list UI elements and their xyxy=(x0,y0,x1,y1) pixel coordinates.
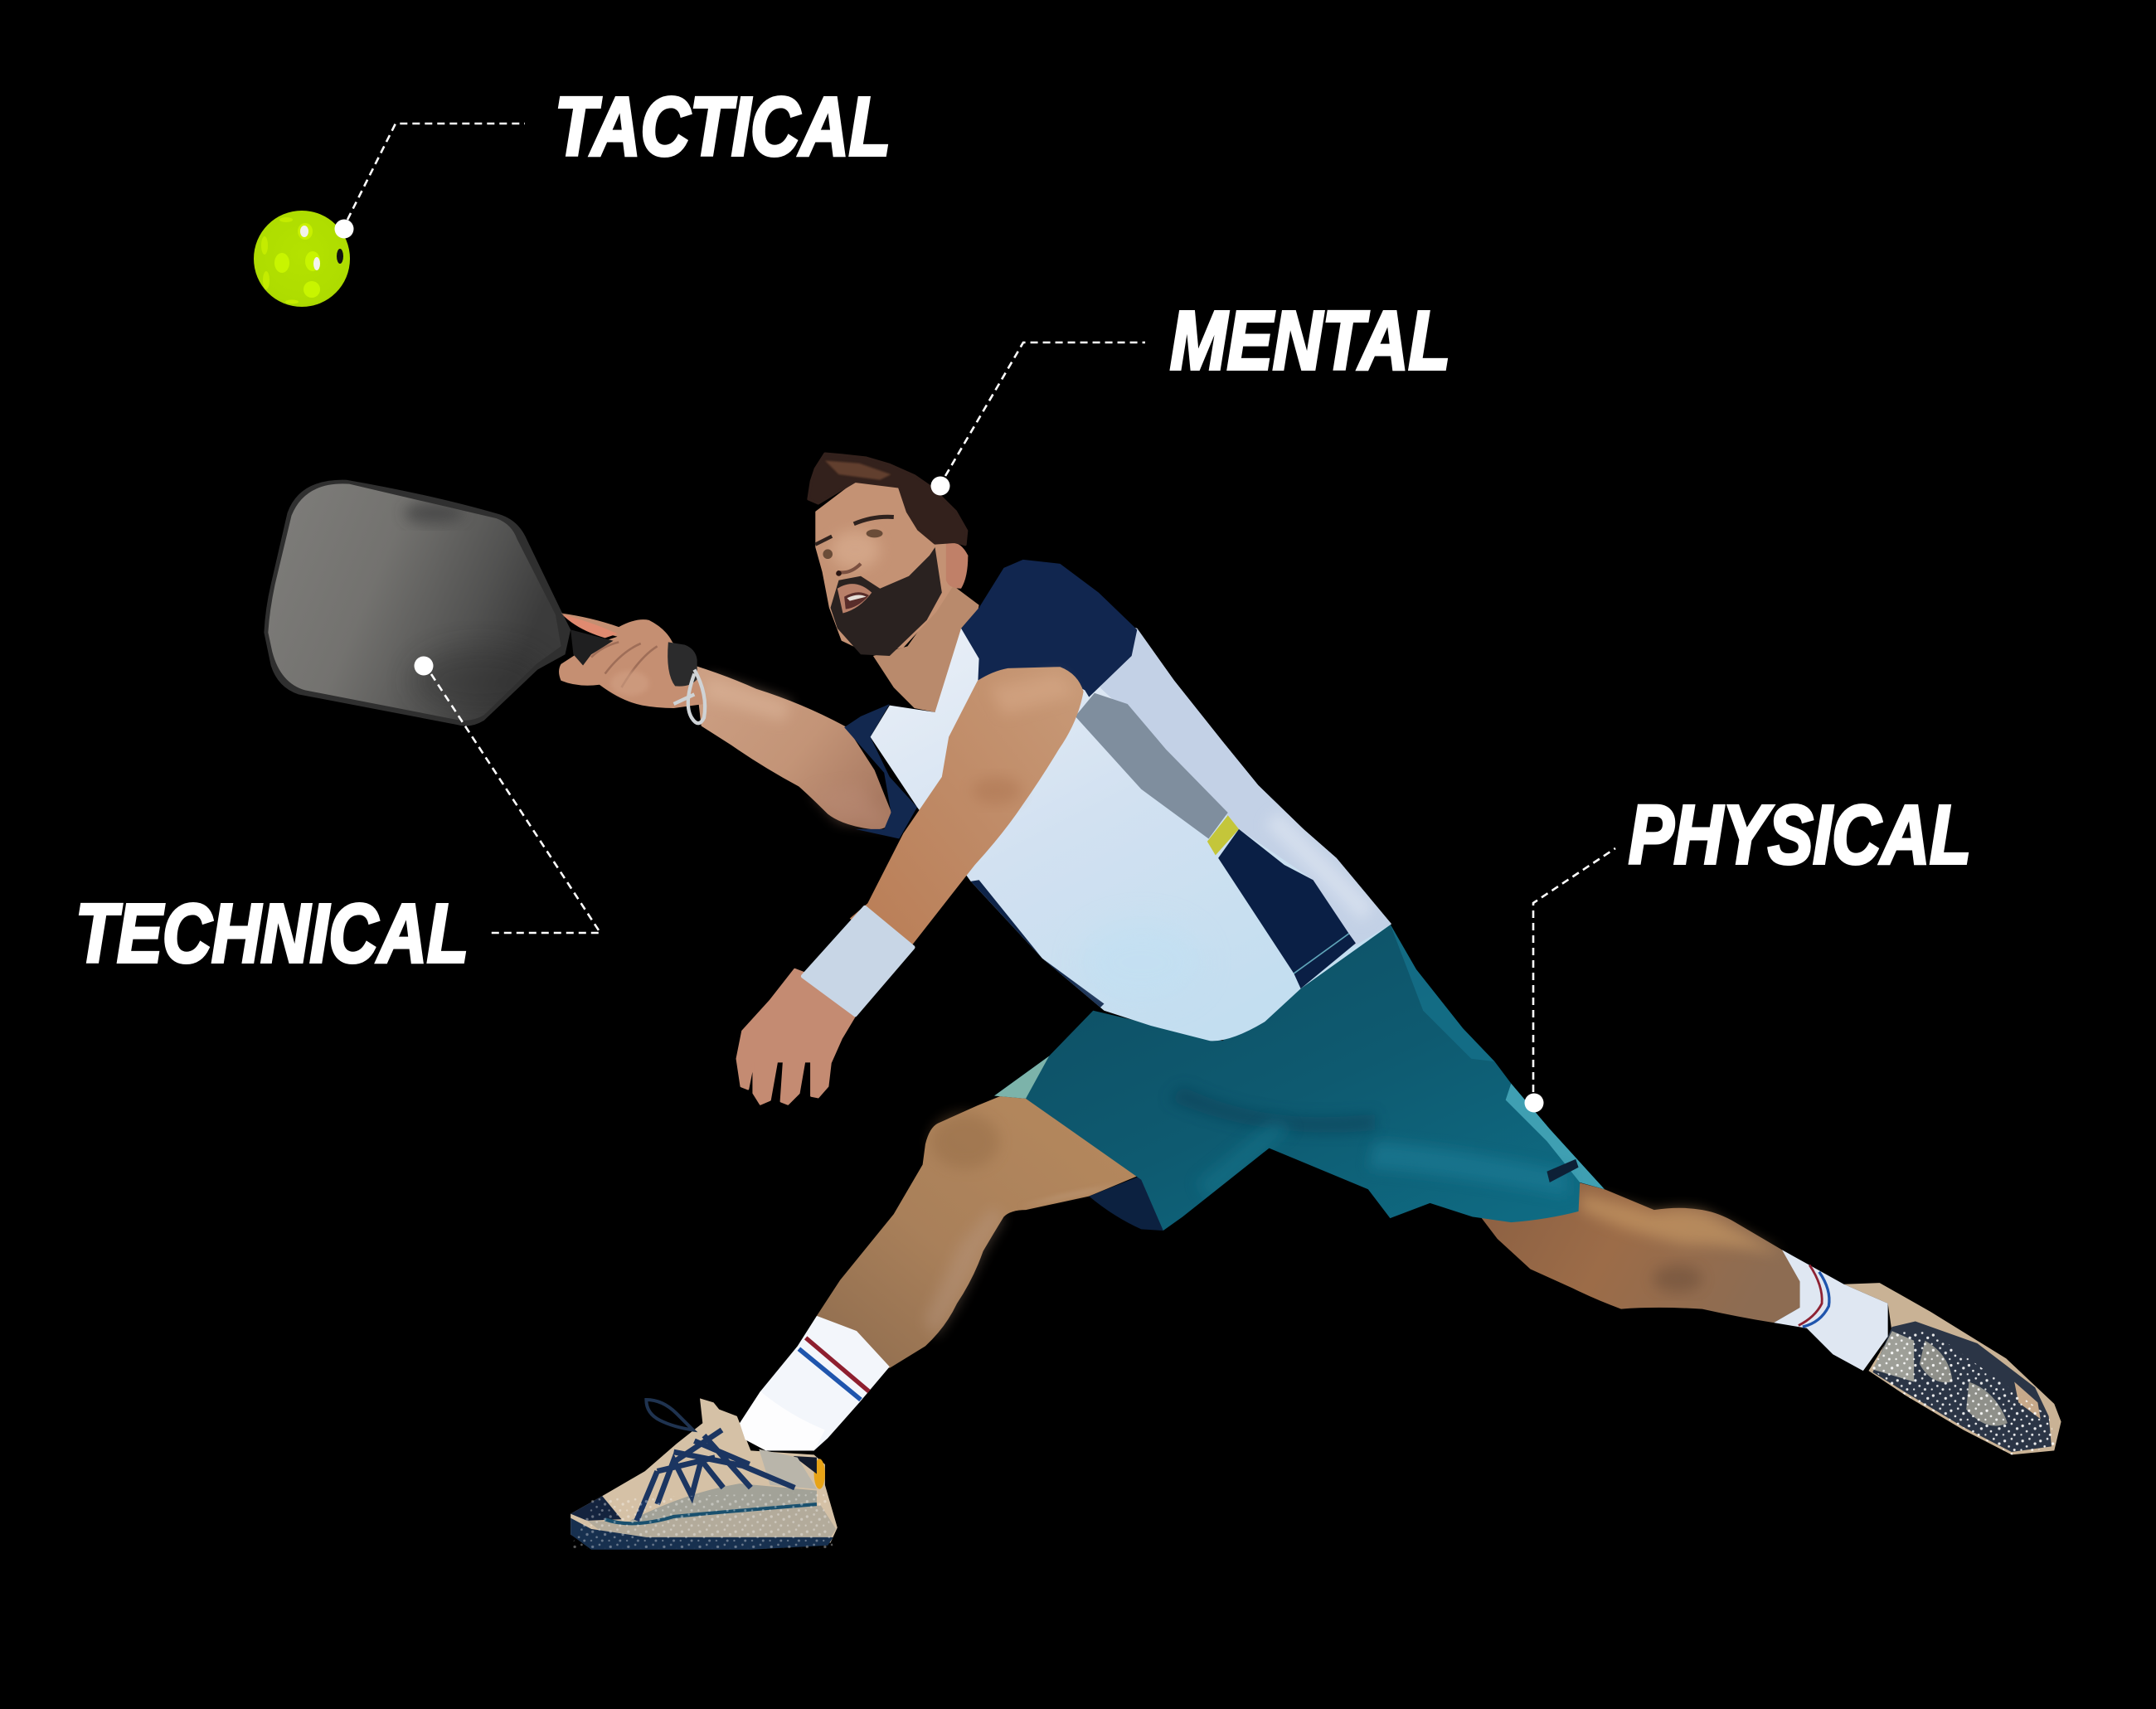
front shoe xyxy=(571,1398,838,1550)
rear leg xyxy=(1475,1182,1800,1323)
marker dot: physical xyxy=(1524,1093,1544,1113)
near hand xyxy=(737,969,867,1105)
rear shoe xyxy=(1844,1283,2061,1454)
label: tactical: TACTICAL xyxy=(555,80,891,173)
icon: pickleball xyxy=(254,211,350,307)
paddle xyxy=(264,480,571,726)
connector: tactical xyxy=(347,124,525,220)
connector: mental xyxy=(945,342,1145,476)
label: technical: TECHNICAL xyxy=(75,887,469,980)
eyebrows eyes nose xyxy=(854,517,894,524)
near sleeve xyxy=(961,560,1137,697)
neck xyxy=(873,585,979,712)
marker dot: technical xyxy=(415,657,433,675)
far sleeve xyxy=(844,704,917,838)
wrist strap xyxy=(673,670,705,723)
hair xyxy=(808,454,967,545)
front sock xyxy=(740,1316,890,1450)
label: mental: MENTAL xyxy=(1170,294,1450,387)
hand on grip xyxy=(559,614,704,708)
shirt xyxy=(871,591,1391,1041)
player and paddle xyxy=(264,454,2061,1550)
ear xyxy=(946,542,968,589)
connector: physical xyxy=(1533,848,1615,1092)
paddle handle xyxy=(571,629,697,687)
far arm xyxy=(694,666,894,829)
front leg xyxy=(817,1086,1155,1368)
marker dot: tactical xyxy=(335,219,353,239)
rear sock xyxy=(1774,1250,1888,1371)
beard xyxy=(831,547,942,656)
label: physical: PHYSICAL xyxy=(1629,789,1971,881)
wristband xyxy=(803,907,913,1015)
near arm xyxy=(850,667,1084,959)
head xyxy=(808,454,968,656)
shorts xyxy=(994,924,1605,1231)
marker dot: mental xyxy=(930,476,950,496)
connector: technical xyxy=(431,674,600,933)
